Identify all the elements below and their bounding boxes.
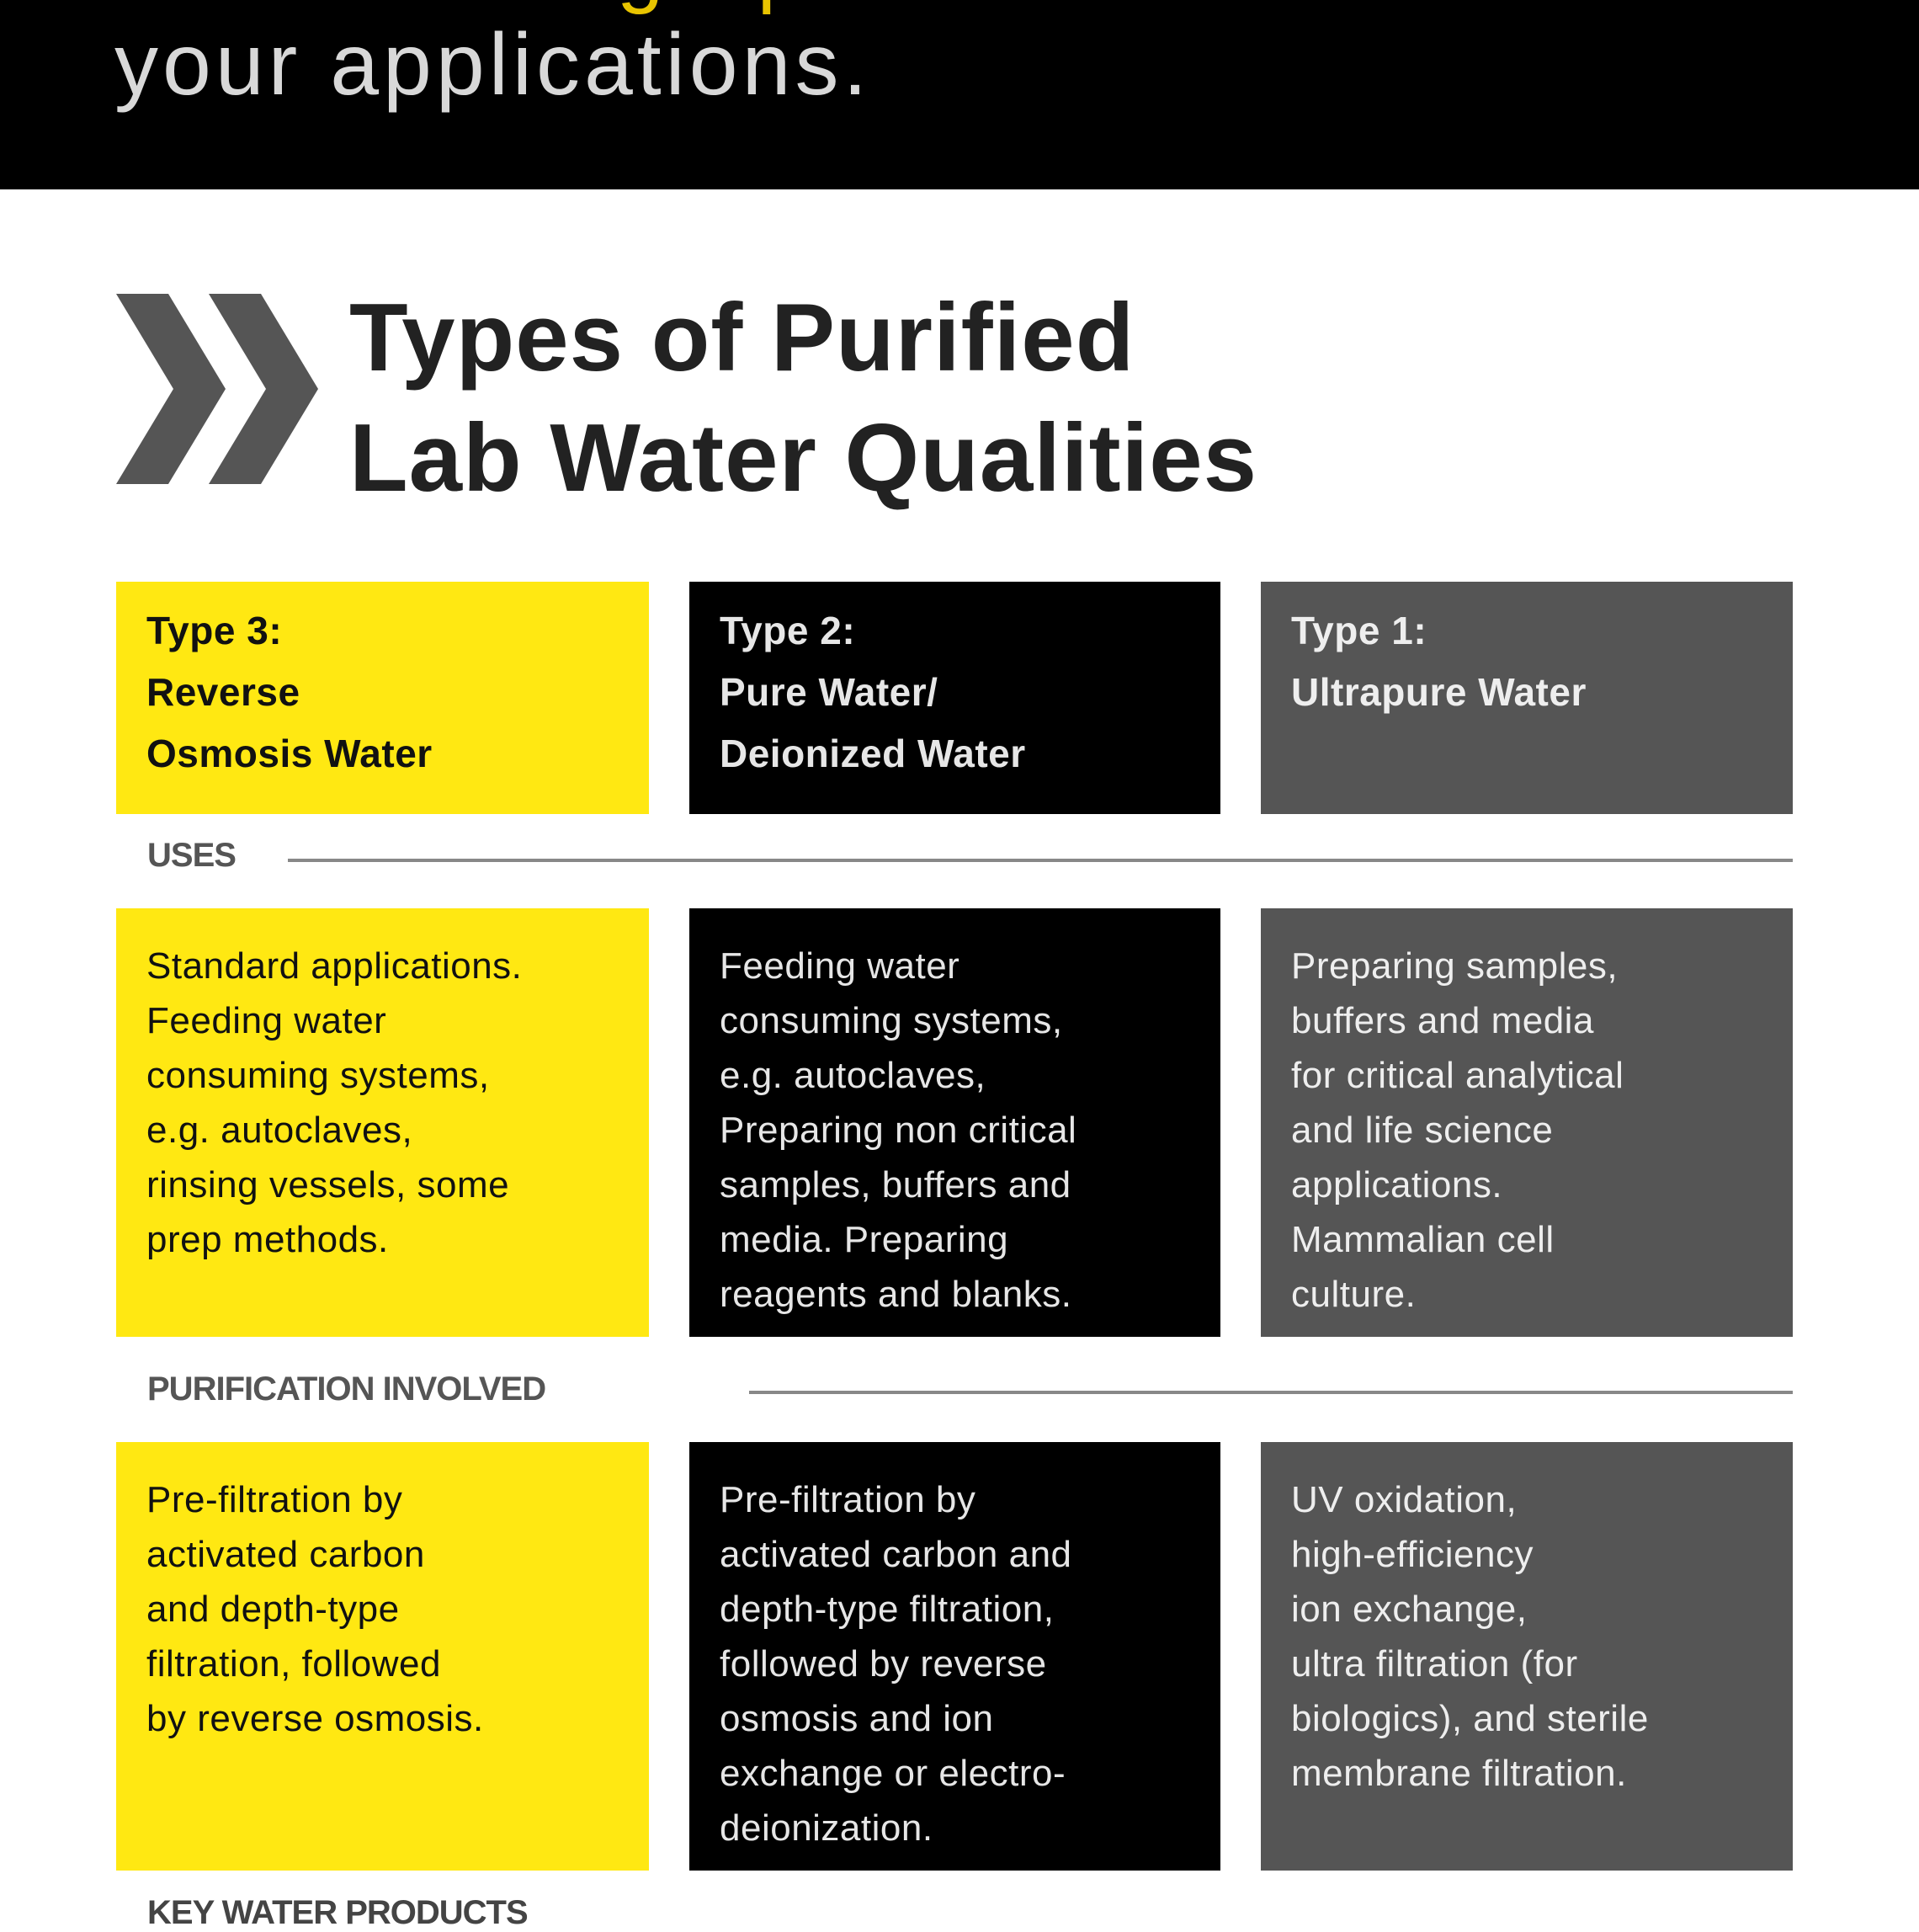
panel: type 2 header: Deionized Water bbox=[720, 732, 1026, 775]
title: Lab Water Qualities bbox=[349, 405, 1257, 512]
panel: type 2 uses: Preparing non critical bbox=[720, 1110, 1076, 1151]
panel: type 3 uses: consuming systems, bbox=[146, 1055, 490, 1096]
panel: type 1 header: Ultrapure Water bbox=[1291, 670, 1587, 714]
panel: type 3 header bbox=[116, 582, 649, 814]
label: purification involved: PURIFICATION INVOLVED bbox=[147, 1370, 545, 1408]
header band bbox=[0, 0, 1919, 189]
panel: type 3 uses: rinsing vessels, some bbox=[146, 1164, 509, 1206]
label: uses: USES bbox=[147, 837, 236, 874]
panel: type 1 purification: ion exchange, bbox=[1291, 1589, 1527, 1630]
panel: type 3 purification: by reverse osmosis. bbox=[146, 1698, 484, 1739]
panel: type 3 uses: Standard applications. bbox=[146, 945, 522, 987]
panel: type 1 uses: buffers and media bbox=[1291, 1000, 1594, 1041]
panel: type 2 uses: reagents and blanks. bbox=[720, 1274, 1072, 1315]
panel: type 1 uses: Mammalian cell bbox=[1291, 1219, 1555, 1260]
panel: type 2 uses: Feeding water bbox=[720, 945, 960, 987]
panel: type 3 purification: filtration, followed bbox=[146, 1643, 441, 1685]
panel: type 3 uses: e.g. autoclaves, bbox=[146, 1110, 412, 1151]
panel: type 2 header bbox=[689, 582, 1220, 814]
panel: type 2 uses: media. Preparing bbox=[720, 1219, 1008, 1260]
header text: your applications. bbox=[114, 16, 871, 114]
panel: type 3 uses: prep methods. bbox=[146, 1219, 389, 1260]
panel: type 2 purification: osmosis and ion bbox=[720, 1698, 993, 1739]
panel: type 1 purification: membrane filtration. bbox=[1291, 1753, 1627, 1794]
panel: type 3 uses bbox=[116, 908, 649, 1337]
panel: type 3 header: Osmosis Water bbox=[146, 732, 433, 775]
title bbox=[349, 285, 1257, 512]
panel: type 1 purification: high-efficiency bbox=[1291, 1534, 1534, 1575]
panel: type 1 purification: ultra filtration (for bbox=[1291, 1643, 1578, 1685]
icon: chevrons bbox=[116, 294, 318, 484]
panel: type 3 purification: Pre-filtration by bbox=[146, 1479, 402, 1520]
panel: type 1 purification: biologics), and sterile bbox=[1291, 1698, 1649, 1739]
panel: type 2 uses bbox=[689, 908, 1220, 1337]
panel: type 2 uses: consuming systems, bbox=[720, 1000, 1063, 1041]
panel: type 1 header: Type 1: bbox=[1291, 609, 1427, 652]
panel: type 2 purification: depth-type filtration, bbox=[720, 1589, 1054, 1630]
panel: type 1 header bbox=[1261, 582, 1793, 814]
panel: type 1 uses: for critical analytical bbox=[1291, 1055, 1624, 1096]
panel: type 1 uses: applications. bbox=[1291, 1164, 1502, 1206]
panel: type 1 uses: Preparing samples, bbox=[1291, 945, 1618, 987]
panel: type 2 header: Pure Water/ bbox=[720, 670, 938, 714]
panel: type 2 purification: activated carbon and bbox=[720, 1534, 1072, 1575]
label: key water products (cut off): KEY WATER PRODUCTS bbox=[147, 1894, 528, 1931]
panel: type 3 purification: and depth-type bbox=[146, 1589, 400, 1630]
panel: type 3 header: Reverse bbox=[146, 670, 300, 714]
panel: type 3 uses: Feeding water bbox=[146, 1000, 386, 1041]
panel: type 2 purification: followed by reverse bbox=[720, 1643, 1047, 1685]
panel: type 2 purification: Pre-filtration by bbox=[720, 1479, 975, 1520]
panel: type 2 purification: exchange or electro- bbox=[720, 1753, 1066, 1794]
panel: type 2 uses: samples, buffers and bbox=[720, 1164, 1071, 1206]
panel: type 1 uses: culture. bbox=[1291, 1274, 1416, 1315]
panel: type 1 purification: UV oxidation, bbox=[1291, 1479, 1517, 1520]
panel: type 2 purification: deionization. bbox=[720, 1807, 933, 1849]
panel: type 2 purification bbox=[689, 1442, 1220, 1871]
title: Types of Purified bbox=[349, 285, 1135, 391]
panel: type 2 header: Type 2: bbox=[720, 609, 855, 652]
panel: type 3 header: Type 3: bbox=[146, 609, 282, 652]
panel: type 1 purification bbox=[1261, 1442, 1793, 1871]
panel: type 1 uses bbox=[1261, 908, 1793, 1337]
panel: type 3 purification: activated carbon bbox=[146, 1534, 425, 1575]
panel: type 2 uses: e.g. autoclaves, bbox=[720, 1055, 986, 1096]
panel: type 1 uses: and life science bbox=[1291, 1110, 1553, 1151]
panel: type 3 purification bbox=[116, 1442, 649, 1871]
